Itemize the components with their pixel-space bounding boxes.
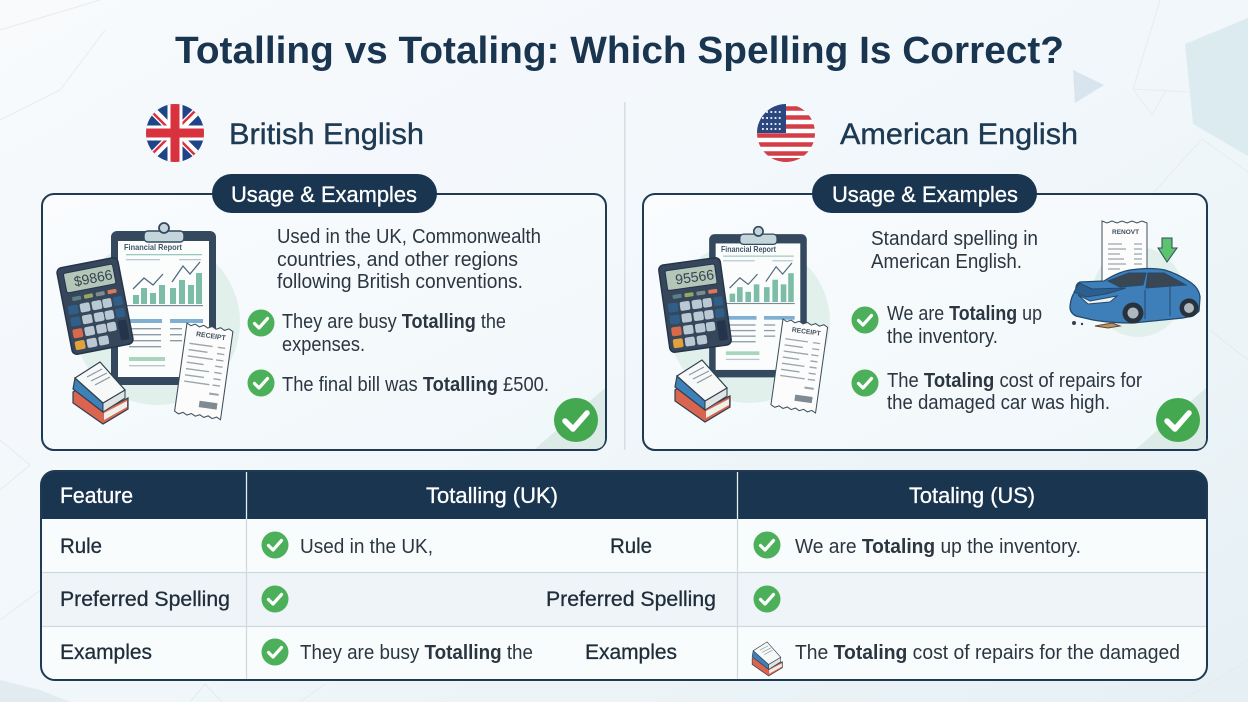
illustration: finance documents: Financial Report [721, 244, 776, 254]
British English heading [146, 102, 424, 164]
row: Rule: Rule [60, 535, 102, 558]
row: Examples: Examples [60, 641, 152, 664]
example 1: expenses. [282, 334, 365, 356]
row: Rule: Used in the UK, [300, 536, 433, 558]
title: Totalling vs Totaling: Which Spelling Is Correct? [175, 30, 1064, 72]
illustration: finance documents: 95566 [674, 266, 715, 287]
row: Examples [60, 638, 1180, 676]
usage pill [212, 174, 437, 213]
description text [277, 226, 541, 293]
usage pill: Usage & Examples [231, 182, 417, 207]
illustration: damaged car and receipt: RENOVT [1112, 229, 1139, 236]
panel: British English [42, 102, 606, 450]
row: Rule [60, 532, 1081, 558]
icon: US flag [757, 104, 815, 162]
row: Preferred Spelling: Preferred Spelling [546, 588, 716, 611]
description text: following British conventions. [277, 271, 523, 293]
example 1: the inventory. [887, 326, 998, 348]
icon: books [752, 642, 782, 676]
comparison table [41, 471, 1207, 680]
icon: large check [554, 398, 598, 442]
table header: Totalling (UK) [426, 483, 558, 508]
illustration: finance documents: $9866 [72, 266, 114, 289]
icon: large check [1156, 398, 1200, 442]
illustration: finance documents [658, 227, 830, 422]
example 2 [852, 370, 1142, 414]
American English heading [757, 104, 1078, 162]
row: Examples: Examples [585, 641, 677, 664]
description text: American English. [871, 251, 1022, 273]
example 2: The final bill was Totalling £500. [282, 374, 549, 396]
illustration: damaged car and receipt [1070, 221, 1200, 337]
table header: Feature [60, 483, 133, 508]
icon: UK flag [146, 102, 204, 164]
example 1: They are busy Totalling the [282, 311, 506, 333]
American English heading: American English [840, 118, 1078, 151]
description text [871, 228, 1038, 273]
usage pill [812, 174, 1037, 213]
British English heading: British English [229, 118, 424, 151]
table rows background [41, 471, 1207, 680]
row: Preferred Spelling [60, 586, 780, 612]
illustration: finance documents: RECEIPT [791, 327, 822, 338]
row: Preferred Spelling: Preferred Spelling [60, 588, 230, 611]
description text: Used in the UK, Commonwealth [277, 226, 541, 248]
row: Examples: They are busy Totalling the [300, 642, 533, 664]
usage card [42, 194, 606, 450]
illustration: finance documents: Financial Report [124, 242, 182, 252]
row: Rule: We are Totaling up the inventory. [795, 536, 1081, 558]
usage pill: Usage & Examples [832, 182, 1018, 207]
panel: American English [643, 104, 1207, 450]
row: Examples: The Totaling cost of repairs for the damaged [795, 642, 1180, 664]
example 1 [248, 310, 506, 356]
example 2: the damaged car was high. [887, 392, 1110, 414]
example 1 [852, 303, 1042, 348]
illustration: finance documents: RECEIPT [196, 331, 227, 342]
description text: Standard spelling in [871, 228, 1038, 250]
table header: Totaling (US) [909, 483, 1035, 508]
example 1: We are Totaling up [887, 303, 1042, 325]
table header [60, 483, 1035, 508]
illustration: finance documents [56, 223, 240, 424]
description text: countries, and other regions [277, 249, 518, 271]
row: Rule: Rule [610, 535, 652, 558]
usage card [643, 194, 1207, 450]
example 2: The Totaling cost of repairs for [887, 370, 1142, 392]
